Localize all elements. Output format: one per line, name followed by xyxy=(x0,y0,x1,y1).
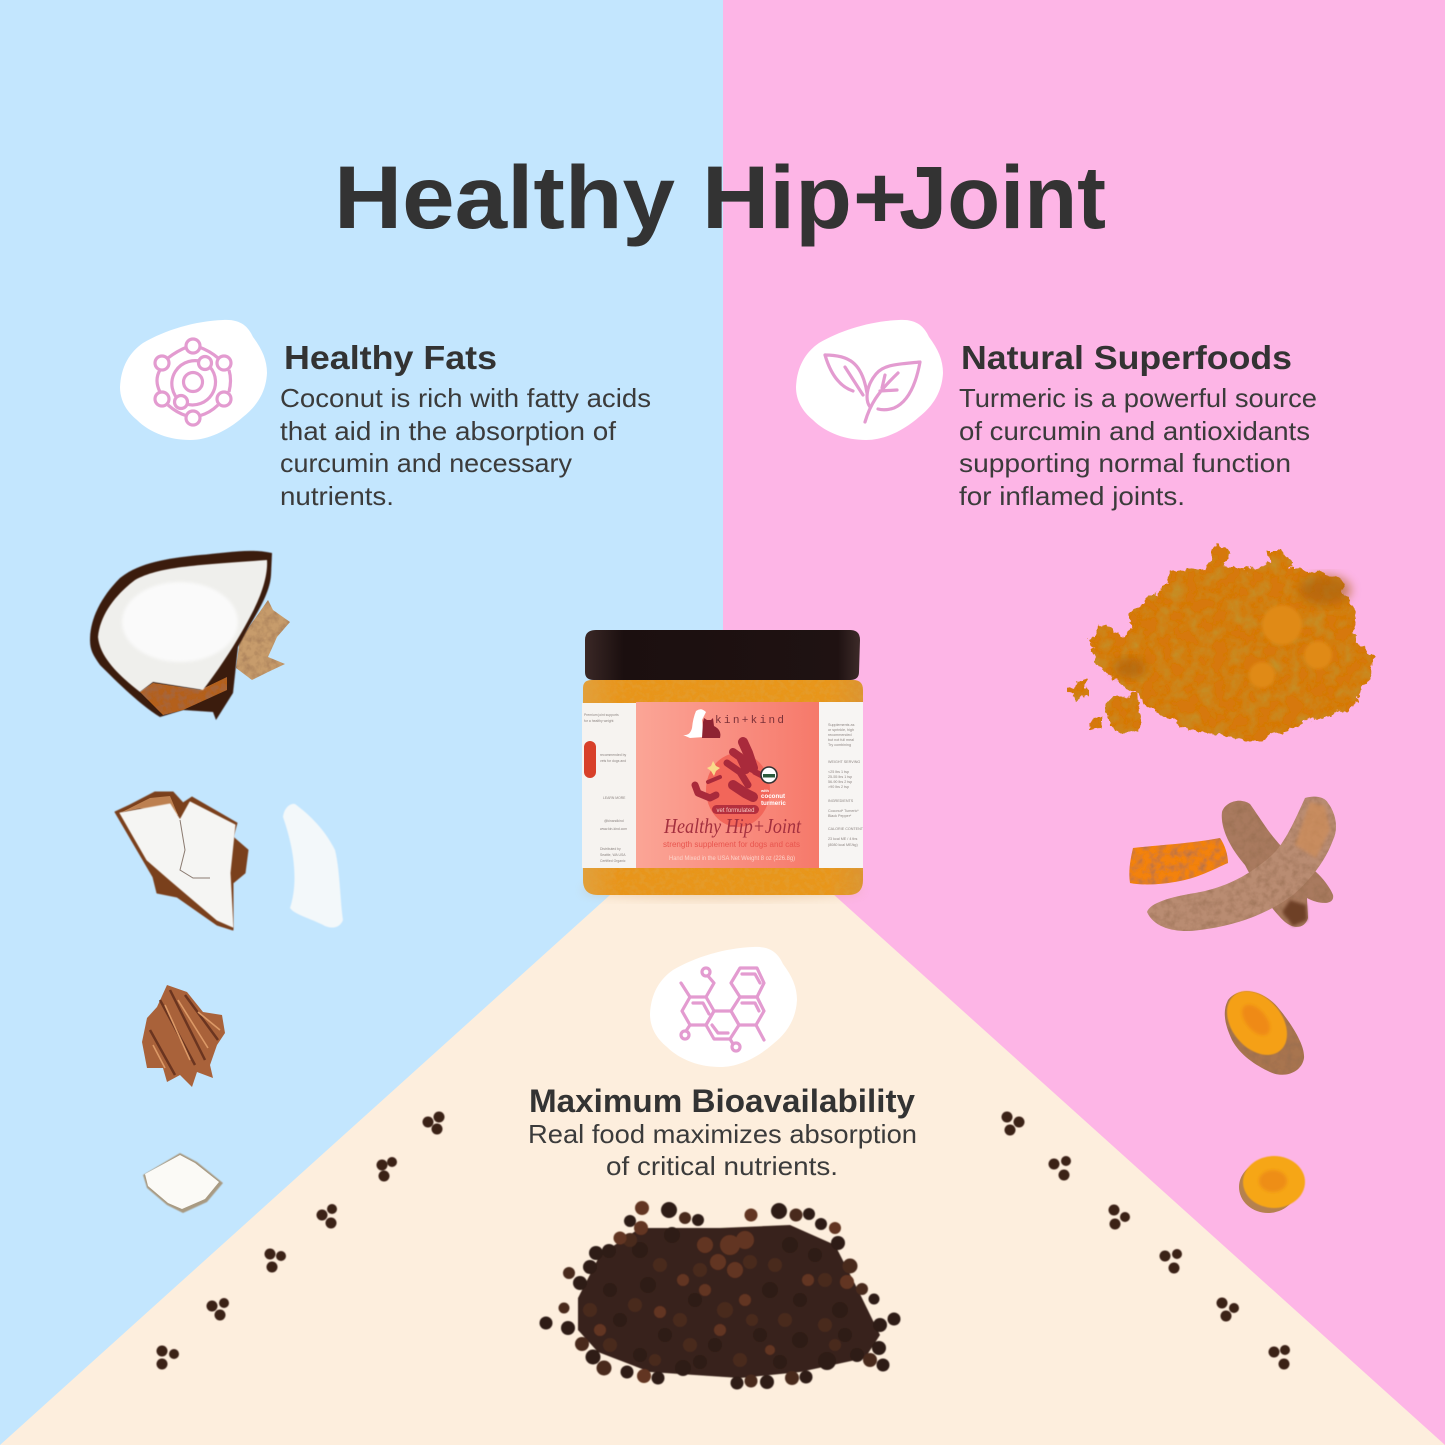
turmeric powder pile xyxy=(1068,543,1373,738)
coconut husk fibre xyxy=(236,600,290,680)
turmeric: crossed roots xyxy=(1147,797,1336,931)
title: + xyxy=(853,147,907,247)
title: Healthy xyxy=(334,147,676,247)
label: with coconut turmeric: turmeric xyxy=(761,800,786,807)
background: cream triangle panel xyxy=(0,794,1445,1445)
label: with coconut turmeric: coconut xyxy=(761,793,785,800)
title: Joint xyxy=(899,147,1106,247)
heading: maximum bioavailability: Maximum Bioavailability xyxy=(529,1083,915,1119)
icon: leaves in white blob xyxy=(796,320,943,440)
text block: natural superfoods description: of curcumin and antioxidants xyxy=(959,416,1310,446)
label: right white side panel: (8080 kcal ME/kg) xyxy=(828,843,858,847)
text block: healthy fats description: Coconut is rich with fatty acids xyxy=(280,383,651,413)
peppercorn clusters: left diagonal xyxy=(156,1112,444,1370)
label: left white side panel: vets for dogs and xyxy=(600,759,626,763)
text block: natural superfoods description xyxy=(959,383,1317,511)
label: right white side panel: Supplements as xyxy=(828,723,855,727)
coconut: small white chunk xyxy=(143,1153,223,1213)
label: left white side panel: for a healthy weight xyxy=(584,719,613,723)
title: Hip xyxy=(702,147,852,247)
peppercorn clusters: right diagonal xyxy=(1002,1112,1290,1370)
label: right white side panel: Coconut* Tumeric* xyxy=(828,809,859,813)
label: right white side panel: Try combining xyxy=(828,743,851,747)
jar lid xyxy=(585,630,860,680)
label: left white side panel: recommended by xyxy=(600,753,627,757)
label: product name: Healthy Hip+Joint xyxy=(663,814,802,838)
label: right white side panel xyxy=(819,702,864,868)
label: left white side panel xyxy=(582,703,636,868)
text block: natural superfoods description: Turmeric is a powerful source xyxy=(959,383,1317,413)
label: right white side panel: recommended xyxy=(828,733,852,737)
label: product subtitle: strength supplement for dogs and cats xyxy=(663,840,800,849)
label: left white side panel: www.kin-kind.com xyxy=(600,827,627,831)
coconut: broken piece xyxy=(115,792,248,930)
heading: natural superfoods: Natural Superfoods xyxy=(961,339,1292,376)
label: right white side panel: Black Pepper* xyxy=(828,814,852,818)
text block: healthy fats description: curcumin and necessary xyxy=(280,448,572,478)
text block: natural superfoods description: supporting normal function xyxy=(959,448,1291,478)
label: brand name: kin+kind xyxy=(715,715,784,727)
label: left white side panel: Seattle, WA USA xyxy=(600,853,626,857)
label: right white side panel: 23 kcal ME / 4 tbs xyxy=(828,837,857,841)
icon: atom in white blob xyxy=(120,320,267,440)
text block: healthy fats description xyxy=(280,383,651,511)
title xyxy=(334,147,1106,247)
label: left white side panel: Certified Organic xyxy=(600,859,626,863)
label: with coconut turmeric xyxy=(760,788,786,807)
label: right white side panel: WEIGHT SERVING xyxy=(828,760,860,764)
label: right white side panel: but not full meal xyxy=(828,738,854,742)
icon: molecule in white blob xyxy=(650,947,797,1067)
coconut: white flake xyxy=(283,804,343,928)
background: blue left panel xyxy=(0,0,723,1445)
label: left white side panel: @kinandkind xyxy=(604,819,624,823)
label: right white side panel: <25 lbs 1 tsp xyxy=(828,770,849,774)
label: organic seal xyxy=(761,767,777,783)
label: yellow star xyxy=(707,761,720,776)
panel: maximum bioavailability text xyxy=(528,1083,917,1181)
panel: healthy fats text xyxy=(280,339,651,511)
label: right white side panel: >90 lbs 2 tsp xyxy=(828,785,849,789)
label: right white side panel: INGREDIENTS xyxy=(828,799,854,803)
panel: natural superfoods text xyxy=(959,339,1317,511)
text block: bioavailability description: Real food maximizes absorption xyxy=(528,1119,917,1149)
coconut: brown husk chip xyxy=(142,985,225,1087)
coconut: large shell piece xyxy=(90,551,290,720)
text block: bioavailability description: of critical nutrients. xyxy=(606,1151,838,1181)
background: pink right panel xyxy=(723,0,1445,1445)
label: left white side panel: Distributed by xyxy=(600,847,621,851)
jar body with turmeric powder xyxy=(583,680,863,895)
label: central pink panel xyxy=(636,702,819,868)
label: vet formulated pill: vet formulated xyxy=(716,808,755,814)
label: dog and cat logo xyxy=(683,709,720,738)
label: right white side panel: 56-90 lbs 2 tsp xyxy=(828,780,852,784)
label: right white side panel: 25-55 lbs 1 tsp xyxy=(828,775,852,779)
label: left white side panel: LEARN MORE xyxy=(603,796,626,800)
heading: healthy fats: Healthy Fats xyxy=(284,339,497,376)
label: dark red turmeric root art xyxy=(695,742,765,798)
label: vet formulated pill xyxy=(712,805,759,814)
product jar xyxy=(582,630,864,900)
label: right white side panel: CALORIE CONTENT xyxy=(828,827,864,831)
text block: natural superfoods description: for inflamed joints. xyxy=(959,481,1185,511)
label: with coconut turmeric: with xyxy=(760,788,770,793)
text block: healthy fats description: nutrients. xyxy=(280,481,394,511)
text block: bioavailability description xyxy=(528,1119,917,1181)
label: net weight line: Hand Mixed in the USA Net Weight 8 oz (226.8g) xyxy=(669,856,795,862)
turmeric: cut slice xyxy=(1215,979,1304,1075)
label: right white side panel: or sprinkle, high xyxy=(828,728,854,732)
turmeric: round slice xyxy=(1239,1156,1305,1213)
label: coral circle behind root xyxy=(706,753,770,827)
turmeric: orange slice strip xyxy=(1129,838,1228,884)
text block: healthy fats description: that aid in the absorption of xyxy=(280,416,617,446)
label: left white side panel: Premium joint supports xyxy=(584,713,619,717)
black pepper pile xyxy=(540,1201,900,1390)
